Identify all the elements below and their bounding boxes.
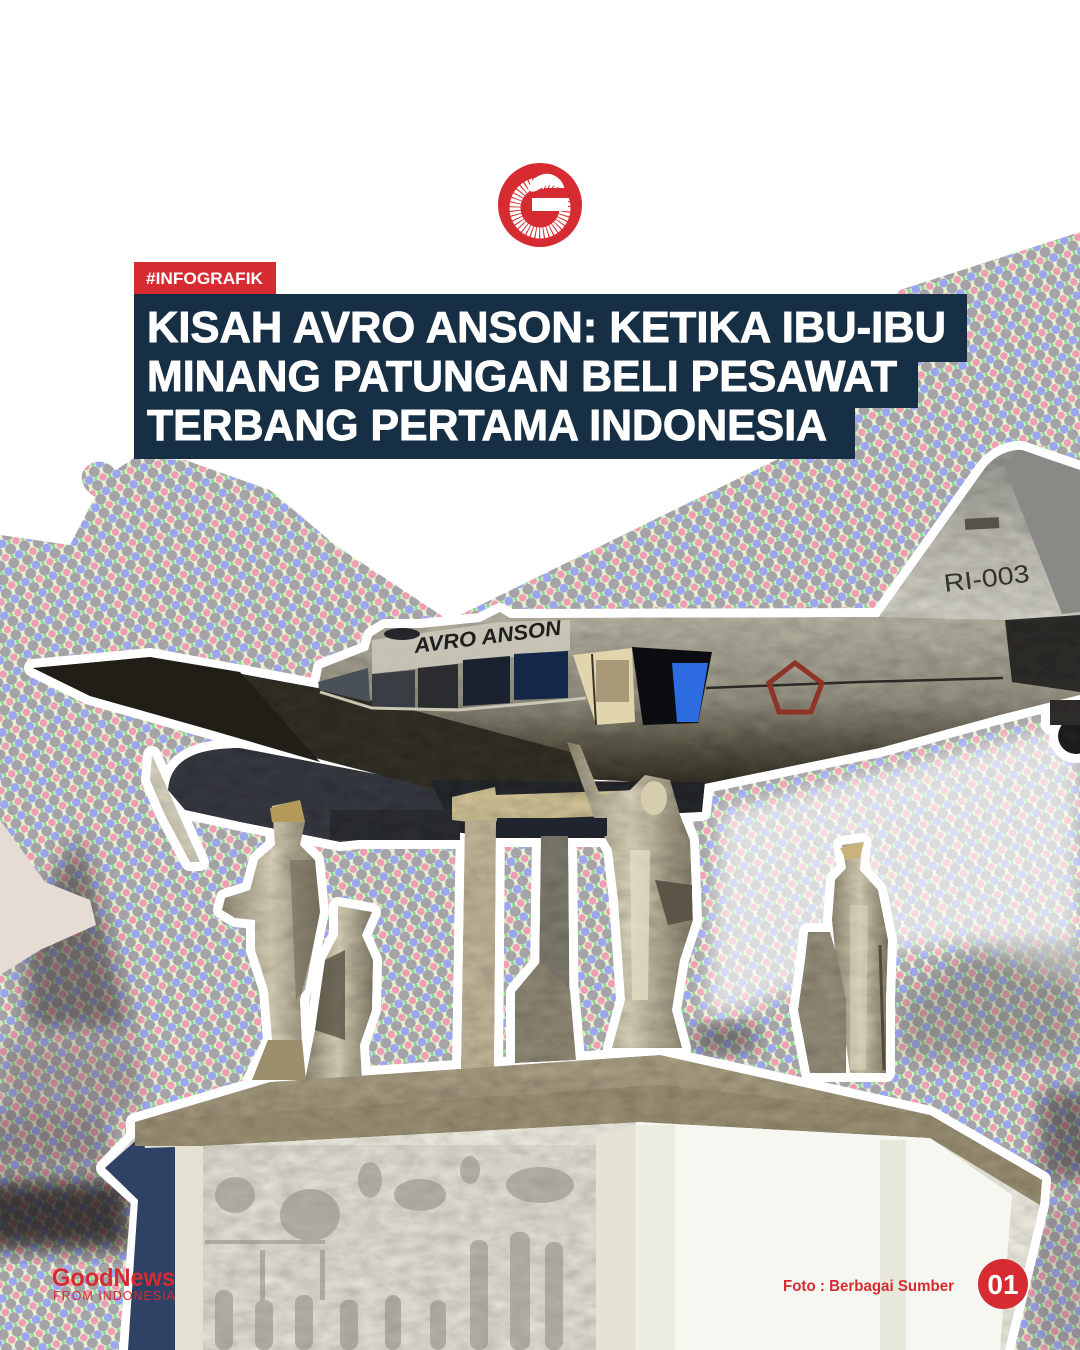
pedestal faces: [105, 1085, 1042, 1350]
title block: MINANG PATUNGAN BELI PESAWAT: [147, 352, 897, 401]
GoodNews from Indonesia logo: FROM INDONESIA: [53, 1289, 176, 1303]
tail dark panel: [1003, 451, 1080, 614]
statue small man: [305, 906, 373, 1080]
shadow under beam: [497, 818, 607, 836]
small man shadow: [315, 950, 345, 1040]
rear engine and propeller: [150, 748, 460, 862]
tail fin: [878, 450, 1080, 630]
column rear: [538, 832, 570, 1060]
label AVRO ANSON: AVRO ANSON: [412, 616, 563, 658]
fuselage details: [33, 451, 1080, 762]
pedestal body: [105, 1122, 1040, 1350]
cupola: [384, 628, 420, 640]
tag #INFOGRAFIK: #INFOGRAFIK: [146, 269, 264, 288]
statue left man: [222, 800, 320, 1080]
slab front: [135, 1085, 1042, 1205]
title block: TERBANG PERTAMA INDONESIA: [147, 401, 827, 450]
underside shadow: [430, 780, 705, 838]
woman head and bag: [630, 781, 692, 1000]
rudder dark section: [1005, 615, 1080, 692]
statue woman: [567, 742, 693, 1048]
right edge column: [596, 1125, 636, 1350]
logo badge: [498, 163, 582, 247]
landing gear: [330, 700, 1080, 840]
statue details: [252, 781, 884, 1080]
cockpit door: [573, 648, 635, 725]
GoodNews from Indonesia logo: [52, 1264, 176, 1303]
monument silhouette: plane, figures and pedestal: [33, 450, 1080, 1350]
statue child: [798, 932, 846, 1073]
tag #INFOGRAFIK: [134, 262, 276, 295]
cockpit window dark: [632, 647, 712, 725]
elder hat and cane: [840, 842, 884, 1070]
page number badge: 01: [987, 1269, 1019, 1300]
wing shading: [33, 657, 320, 762]
blue sky through cockpit: [672, 663, 708, 722]
bird tail fragment on left: [0, 820, 96, 975]
title block: KISAH AVRO ANSON: KETIKA IBU-IBU: [147, 303, 946, 352]
tail marking: [965, 517, 999, 530]
panel pillar left: [637, 1125, 675, 1350]
relief figures: [205, 1156, 574, 1350]
left man hat and shadow: [252, 800, 320, 1080]
column front: [461, 820, 496, 1070]
column strip: [175, 1146, 205, 1350]
monument with stone texture: [33, 450, 1080, 1350]
roundel pentagon: [769, 663, 822, 712]
navy shaded side: [105, 1135, 205, 1350]
fuselage: [318, 612, 1080, 785]
cabin roof highlight: [372, 620, 570, 674]
pedestal slab: [135, 1055, 1042, 1205]
photo credit: Foto : Berbagai Sumber: [783, 1278, 954, 1295]
title block: [134, 294, 967, 459]
side windows: [318, 651, 586, 710]
statue elder: [832, 842, 888, 1073]
tail number: RI-003: [942, 560, 1031, 598]
GoodNews from Indonesia logo: GoodNews: [52, 1264, 175, 1292]
beam: [452, 787, 640, 825]
wing: [33, 657, 600, 795]
fuselage line: [706, 678, 1003, 688]
relief panel: [203, 1145, 596, 1350]
panel pillar: [880, 1140, 906, 1350]
figure behind column: [515, 962, 576, 1063]
right white panel: [636, 1122, 1012, 1350]
page number badge: [978, 1259, 1028, 1309]
white cut-out outline of monument: [33, 450, 1080, 1350]
